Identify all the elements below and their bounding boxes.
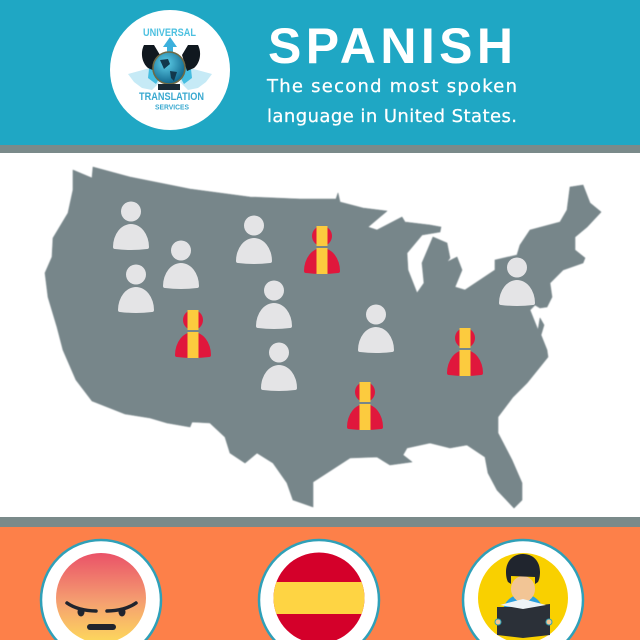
icon: student reading [463,540,583,640]
person icon 6 [261,342,297,391]
logo text: SERVICES [155,104,189,112]
icon: angry face [41,540,161,640]
logo: Universal Translation Services [110,10,230,130]
Spanish flag person 2 [175,310,211,358]
person icon 4 [236,216,272,264]
person icon 5 [256,280,292,329]
logo text [139,27,204,112]
person icon 3 [118,264,154,313]
subtitle [266,76,517,127]
subtitle: The second most spoken [266,76,517,97]
logo text: UNIVERSAL [143,27,196,39]
person icon 7 [358,304,394,353]
logo emblem [128,37,212,90]
footer panel [0,517,640,640]
subtitle: language in United States. [267,106,517,127]
person icon 1 [113,202,149,250]
header band [0,0,640,153]
map of the United States [45,167,601,508]
Spanish flag person 4 [347,382,383,430]
person icon 8 [499,258,535,306]
Spanish flag person 3 [447,328,483,376]
Spanish flag person 1 [304,226,340,274]
logo text: TRANSLATION [139,91,204,103]
icon: Spanish flag [259,540,379,640]
person icon 2 [163,240,199,289]
title: SPANISH [268,18,513,74]
